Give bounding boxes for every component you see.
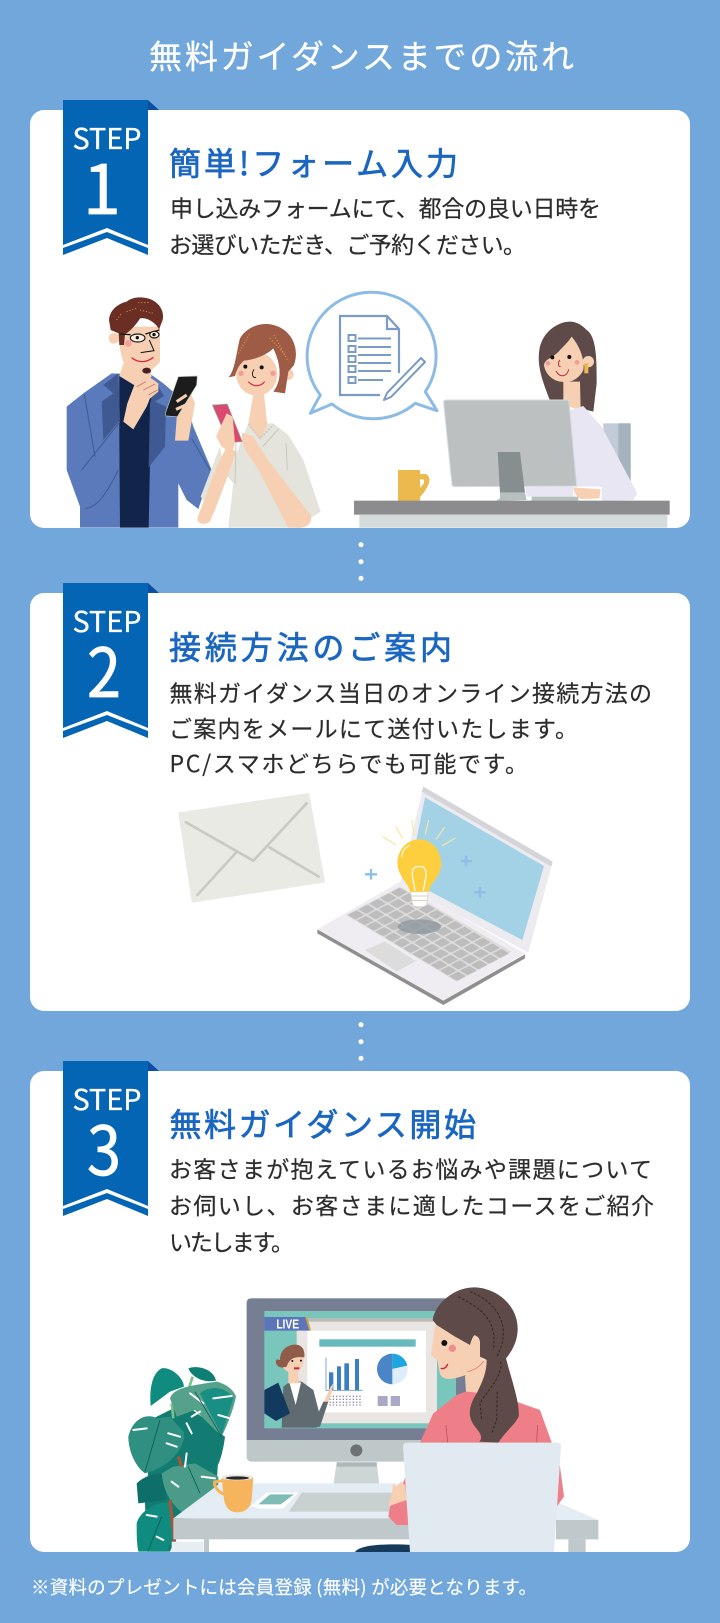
step 2 heading: 接続方法のご案内: [169, 623, 452, 669]
step 1 description: お選びいただき、ご予約ください。: [169, 226, 526, 260]
illustration: desk, monitor and receptionist: [354, 322, 670, 528]
illustration: woman with smartphone: [197, 324, 321, 528]
footnote: ※資料のプレゼントには会員登録 (無料) が必要となります。: [31, 1574, 537, 1600]
step 3 ribbon: 3: [87, 1096, 121, 1195]
step 1 ribbon: STEP: [72, 117, 142, 158]
card 3 background: [30, 1071, 690, 1552]
step 2 ribbon: STEP: [72, 600, 142, 641]
illustration: woman from behind with laptop: [388, 1287, 598, 1552]
illustration: monstera plant: [128, 1367, 236, 1552]
card 1 background: [30, 110, 690, 528]
icon: envelope: [179, 794, 324, 902]
step 1 heading: 簡単!フォーム入力: [169, 139, 458, 185]
bar chart on slide: [326, 1358, 363, 1405]
step 3 description: お伺いし、お客さまに適したコースをご紹介: [169, 1187, 654, 1221]
title: 無料ガイダンスまでの流れ: [149, 30, 574, 78]
step 2 description: ご案内をメールにて送付いたします。: [169, 710, 578, 744]
panel: step 2: [30, 583, 690, 1011]
step 2 description: 無料ガイダンス当日のオンライン接続方法の: [170, 674, 652, 708]
illustration: desk and live-streaming monitor: [172, 1298, 466, 1552]
step 3 description: いたします。: [169, 1224, 294, 1258]
panel: step 1: [30, 100, 690, 528]
step 1 ribbon: [63, 100, 159, 255]
step 3 ribbon: [63, 1061, 159, 1216]
step 3 ribbon: STEP: [72, 1078, 142, 1119]
step 2 description: PC/スマホどちらでも可能です。: [170, 745, 528, 779]
step 2 ribbon: [63, 583, 159, 738]
connector dots 2: [358, 1022, 364, 1061]
speech bubble with form and pen: [307, 292, 437, 419]
card 2 background: [30, 593, 690, 1011]
step 3 description: お客さまが抱えているお悩みや課題について: [169, 1150, 652, 1184]
step 2 description: [169, 674, 652, 779]
icon: laptop with light bulb: [317, 787, 553, 1005]
step 3 description: [169, 1150, 654, 1258]
step 1 ribbon: 1: [83, 135, 121, 234]
live badge: LIVE: [276, 1318, 299, 1332]
panel: step 3: [30, 1061, 690, 1552]
live badge: [264, 1317, 311, 1332]
pie chart on slide: [377, 1354, 408, 1406]
step 1 description: [169, 190, 601, 260]
illustration: man with smartphone: [67, 297, 212, 528]
step 1 description: 申し込みフォームにて、都合の良い日時を: [170, 190, 601, 224]
presenter: [264, 1345, 333, 1428]
step 2 ribbon: 2: [87, 618, 121, 717]
connector dots 1: [358, 542, 364, 581]
step 3 heading: 無料ガイダンス開始: [170, 1100, 476, 1146]
